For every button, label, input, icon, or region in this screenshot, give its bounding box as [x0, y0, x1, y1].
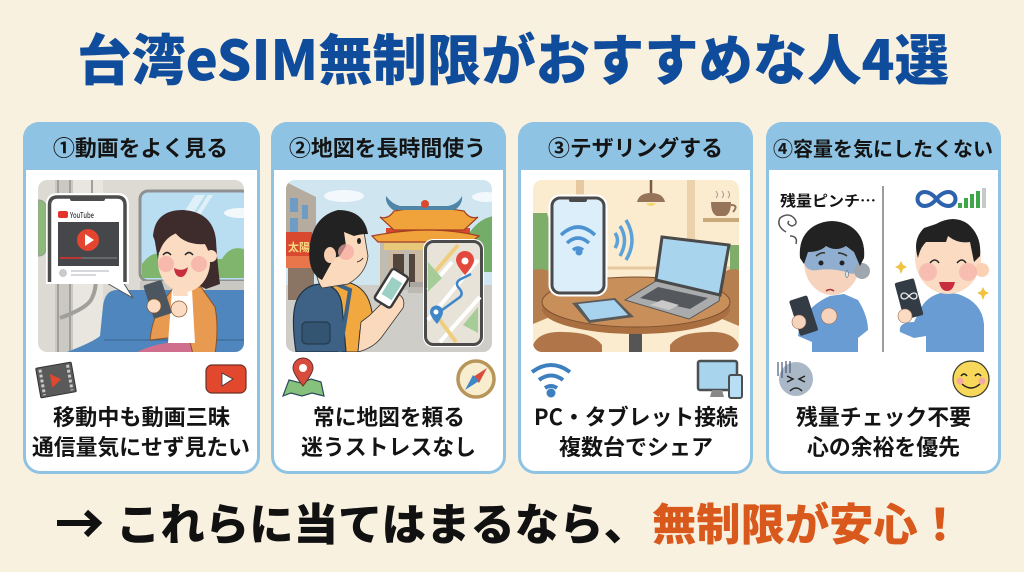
heading: video: ①動画をよく見る: [53, 131, 228, 163]
heading: tethering: ③テザリングする: [548, 131, 723, 163]
text: capacity description: 残量チェック不要: [796, 400, 971, 432]
heading: map: ②地図を長時間使う: [289, 131, 486, 163]
message: orange part: 無制限が安心！: [652, 489, 962, 553]
illustration: phone showing route map: [423, 239, 484, 347]
icon: compass: [458, 361, 494, 397]
text: capacity description: 心の余裕を優先: [807, 430, 960, 462]
callout: phone with YouTube: [46, 193, 133, 298]
text: video description: 移動中も動画三昧: [53, 400, 230, 432]
text: tethering description: [534, 400, 738, 462]
illustration: happy man: [894, 188, 989, 354]
heading: capacity: ④容量を気にしたくない: [773, 133, 993, 162]
illustration: traveller with map at temple: 太陽: [288, 239, 310, 255]
text: video description: [32, 400, 250, 462]
text: map description: 迷うストレスなし: [301, 430, 476, 462]
text: capacity description: [796, 400, 971, 462]
illustration: cafe table with phone, laptop and tablet: [533, 180, 739, 352]
icon: smiling face: [953, 361, 989, 397]
callout: phone with YouTube: YouTube: [69, 210, 94, 221]
panel: capacity: [766, 122, 1001, 472]
illustration: traveller with map at temple: [286, 180, 500, 352]
text: tethering description: PC・タブレット接続: [534, 400, 738, 432]
icon: play button: [206, 365, 246, 393]
icon: frowning face: [778, 361, 813, 396]
icon: map pin: [283, 358, 324, 396]
illustration: phone with wifi signal: [551, 197, 632, 294]
panel: video: [23, 122, 260, 472]
text: map description: [301, 400, 476, 462]
arrow: [57, 512, 98, 535]
text: video description: 通信量気にせず見たい: [32, 430, 250, 462]
illustration: woman watching video on train: [38, 180, 256, 354]
text: tethering description: 複数台でシェア: [559, 430, 713, 462]
text: map description: 常に地図を頼る: [313, 400, 465, 432]
bottom message: [57, 489, 962, 553]
title: 台湾eSIM無制限がおすすめな人4選: [77, 16, 949, 96]
icon: film strip: [36, 362, 76, 398]
illustration: worried man: [779, 190, 876, 352]
divider: [882, 186, 884, 352]
panel: map: [271, 122, 506, 472]
message: black part: これらに当てはまるなら、: [116, 489, 648, 553]
panel: tethering: [518, 122, 753, 472]
illustration: worried man: 残量ピンチ…: [780, 190, 876, 211]
icon: monitor and phone: [698, 361, 742, 398]
icon: wifi: [532, 365, 570, 396]
